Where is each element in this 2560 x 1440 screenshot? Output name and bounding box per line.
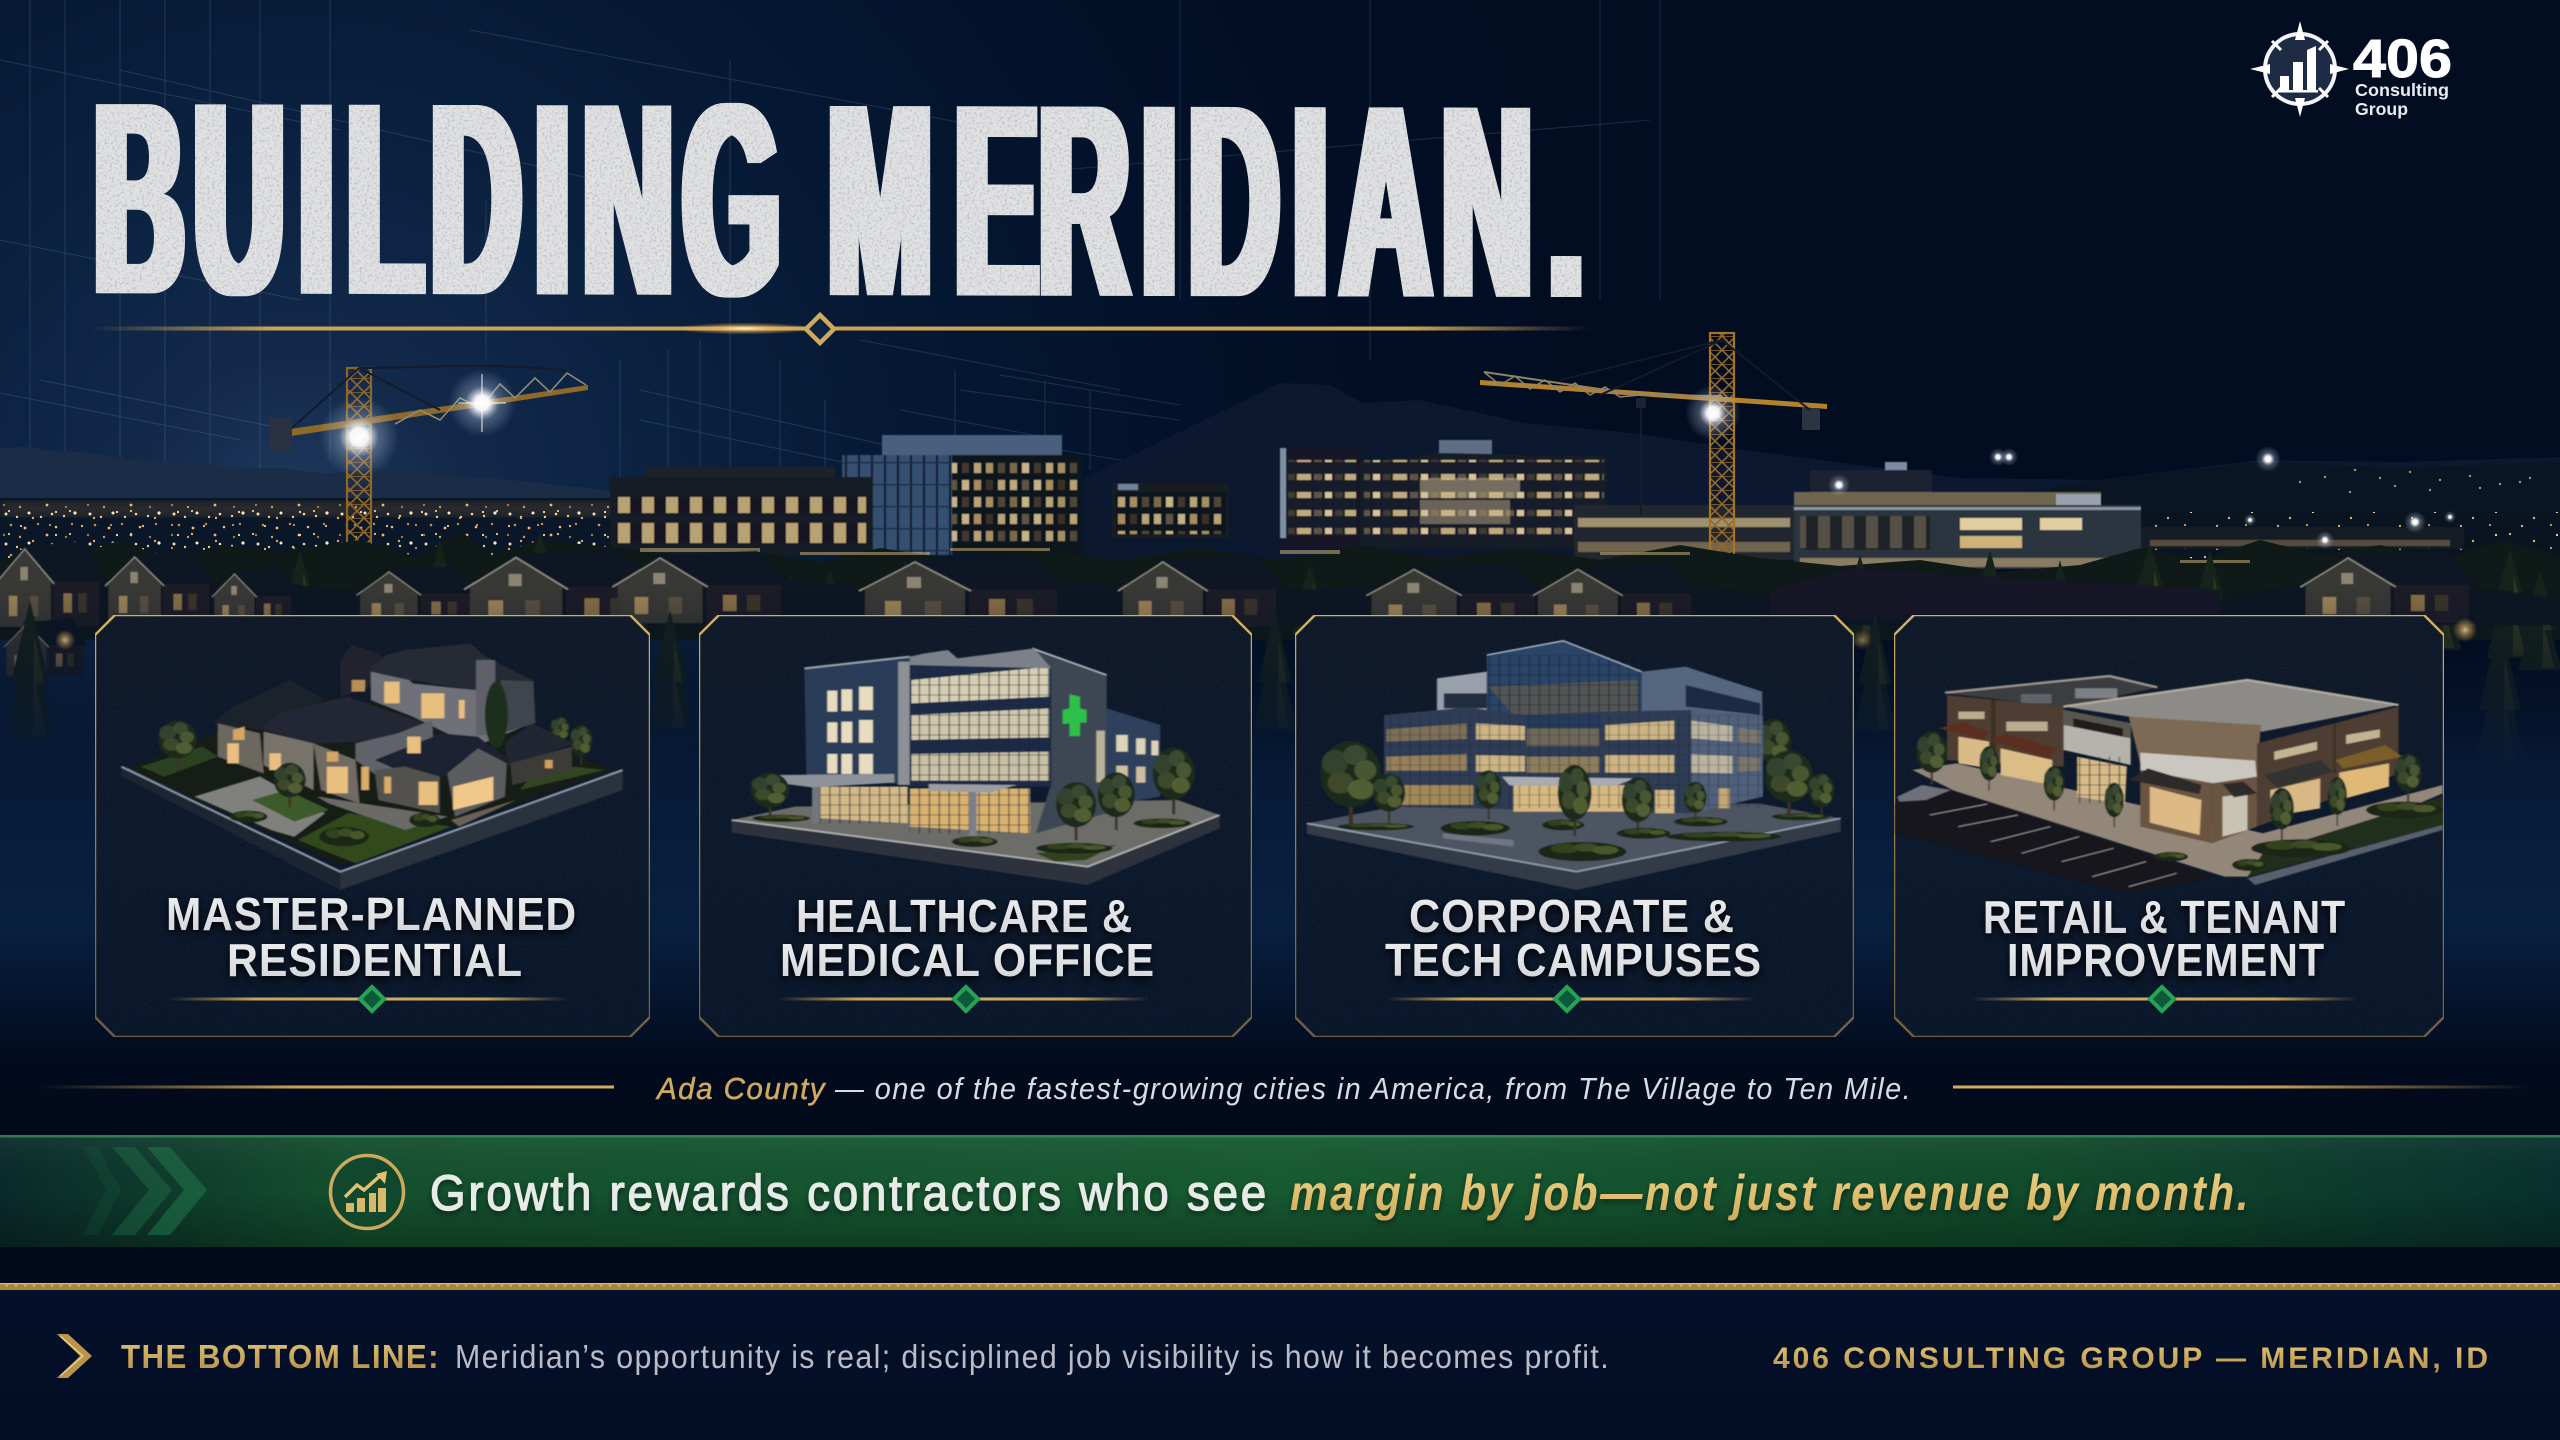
panel: retail and tenant improvement: IMPROVEMENT xyxy=(2007,934,2325,986)
main roof xyxy=(2064,680,2399,732)
tree line xyxy=(0,530,2560,670)
left roofs xyxy=(1945,676,2157,708)
upper left block xyxy=(1437,672,1487,710)
card heading: CORPORATE & xyxy=(1409,890,1735,942)
icon: chevrons xyxy=(83,1147,207,1235)
plaza planters xyxy=(1443,833,1513,847)
icon: growth chart badge xyxy=(330,1156,404,1228)
logo: 406 Consulting Group: Group xyxy=(2355,99,2408,119)
hillside lights xyxy=(2299,469,2531,493)
card frame xyxy=(1295,615,1854,1037)
panel: healthcare and medical office xyxy=(699,615,1252,1037)
panel: master-planned residential xyxy=(95,615,650,1037)
crane left xyxy=(270,366,588,578)
title: BUILDING MERIDIAN. xyxy=(94,46,1584,356)
context line: Ada County: — one of the fastest-growing cities in America, from The Village to Ten Mile. xyxy=(834,1071,1912,1106)
building: dark office block xyxy=(610,467,873,555)
logo compass mark xyxy=(2250,21,2349,117)
logo wordmark: 406 xyxy=(2353,29,2452,89)
building: white office xyxy=(1794,462,2141,569)
panel: healthcare and medical office: MEDICAL OFFICE xyxy=(780,934,1155,986)
glass atrium xyxy=(1487,641,1642,733)
bottom line statement: Meridian’s opportunity is real; disciplined job visibility is how it becomes profit. xyxy=(455,1338,1610,1375)
right facade xyxy=(2257,707,2399,827)
card heading: RETAIL & TENANT xyxy=(1983,891,2346,943)
city lights on valley floor xyxy=(0,498,2560,570)
crane right xyxy=(1480,333,1827,589)
fade of the scene into navy xyxy=(0,590,2560,1060)
building: glass tower xyxy=(842,435,1082,555)
illustration: retail strip xyxy=(1895,676,2443,893)
title divider with diamond xyxy=(90,315,1590,343)
context line: Ada County xyxy=(40,1071,2530,1106)
panel: retail and tenant improvement xyxy=(1894,615,2444,1037)
flood lights xyxy=(1828,446,2456,549)
tower side xyxy=(1032,648,1107,833)
main block xyxy=(1384,707,1763,813)
lower right wing xyxy=(505,723,574,767)
illustration: isometric homes xyxy=(121,643,623,890)
context line: Ada County: Ada County xyxy=(655,1071,827,1106)
left facade xyxy=(1947,695,2064,767)
card divider xyxy=(1971,987,2358,1011)
footer area xyxy=(0,1290,2560,1440)
card frame xyxy=(699,615,1252,1037)
glass center xyxy=(910,658,1051,787)
logo: 406 Consulting Group xyxy=(2250,21,2452,119)
blueprint line overlay xyxy=(0,0,1660,530)
sidewalk xyxy=(1913,763,2443,877)
banner statement: Growth rewards contractors who see xyxy=(430,1165,1269,1221)
icon: footer chevron xyxy=(57,1334,92,1378)
panel: master-planned residential: RESIDENTIAL xyxy=(227,934,523,986)
bottom line statement: THE BOTTOM LINE: xyxy=(121,1338,440,1375)
parking lot xyxy=(1895,790,2217,893)
lower dark field xyxy=(0,1060,2560,1283)
main two-story house xyxy=(371,672,532,747)
illustration: corporate campus xyxy=(1307,641,1841,890)
banner statement xyxy=(430,1165,2251,1221)
central pier xyxy=(2129,717,2261,783)
card frame xyxy=(95,615,650,1037)
back house xyxy=(340,645,386,697)
right wing xyxy=(1101,708,1160,807)
footer credit: 406 CONSULTING GROUP — MERIDIAN, ID xyxy=(1773,1342,2488,1375)
banner statement: margin by job—not just revenue by month. xyxy=(1290,1165,2251,1221)
building: low wing xyxy=(1574,505,1794,560)
trees xyxy=(1916,731,1947,785)
card divider xyxy=(1386,987,1756,1011)
upper right block xyxy=(1642,667,1762,717)
building: distant low extension xyxy=(2141,527,2464,549)
office skyline xyxy=(610,435,2464,569)
logo: 406 Consulting Group: Consulting xyxy=(2355,80,2449,100)
foreground houses xyxy=(0,541,2560,770)
left block xyxy=(804,657,910,785)
illustration: medical building xyxy=(732,648,1220,885)
card divider xyxy=(168,987,568,1011)
card heading: HEALTHCARE & xyxy=(796,890,1133,942)
gold divider bar xyxy=(0,1283,2560,1290)
card frame xyxy=(1894,615,2444,1037)
card divider xyxy=(778,987,1149,1011)
panel: corporate and tech campuses: TECH CAMPUSES xyxy=(1385,934,1762,986)
building: small office xyxy=(1112,483,1229,538)
green cross sign xyxy=(1063,694,1086,736)
green takeaway banner xyxy=(0,1135,2560,1247)
white section xyxy=(2064,710,2131,765)
panel: corporate and tech campuses xyxy=(1295,615,1854,1037)
mountains xyxy=(0,383,2560,560)
ground floor xyxy=(818,787,908,823)
building: curved campus xyxy=(1280,440,1607,548)
front left roofs xyxy=(212,680,325,730)
card heading: MASTER-PLANNED xyxy=(166,888,577,940)
